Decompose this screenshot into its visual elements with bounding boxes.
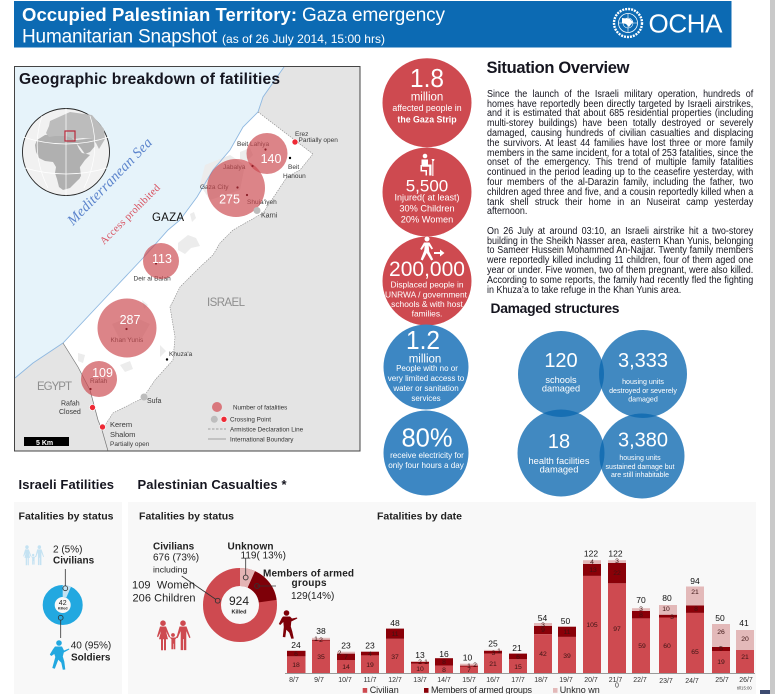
label: unknown: [228, 541, 286, 562]
label: civilians: [53, 545, 95, 567]
segment values: 1: [497, 648, 501, 655]
stat: 5,500 injured: [382, 148, 472, 236]
label: unknown: Unknown: [228, 541, 274, 552]
daily totals: 70: [636, 595, 646, 605]
heading: Situation Overview: Situation Overview: [486, 59, 630, 77]
daily totals: 38: [316, 626, 326, 636]
stat: housing sustained damage: [606, 430, 674, 479]
bars: members of armed groups: [287, 563, 730, 667]
fatality bubbles: [81, 133, 288, 397]
icon: injured person on crutch: [420, 154, 434, 176]
label: soldiers: Soldiers: [71, 653, 111, 664]
daily totals: 54: [538, 613, 547, 623]
text block: situation overview paragraph 1: Since the launch of the Israeli military operation, hundreds of: [486, 89, 753, 100]
segment values: 21: [489, 661, 497, 668]
donut: Israeli fatalities: Killed: [58, 606, 67, 610]
text block: situation overview paragraph 2: building in the Sheikh Nasser area, eastern Khan Yunis, belonging: [486, 236, 753, 247]
segment values: 2: [338, 650, 342, 657]
stat: 1.8 million affected: the Gaza Strip: [397, 115, 457, 125]
stat: 5,500 injured: Injured( at least): [394, 193, 460, 203]
icon: family red: [157, 620, 190, 650]
panel: Palestinian casualties: Fatalities by status: [139, 511, 234, 523]
bubble values: [92, 152, 281, 380]
label: civilians breakdown: Civilians: [153, 541, 195, 552]
segment values: 14: [342, 664, 350, 671]
label: Mediterranean Sea: Mediterranean Sea: [64, 135, 156, 229]
stat: 1.8 million affected: 1.8: [410, 63, 444, 93]
place labels: [59, 131, 338, 448]
date axis labels: 26/7: [739, 677, 753, 684]
stat: 5,500 injured: 30% Children: [399, 204, 455, 214]
place labels: Hanoun: [283, 173, 306, 180]
text block: situation overview paragraph 1: afternoon.: [486, 206, 527, 217]
label: unknown: 119( 13%): [240, 551, 286, 562]
place labels: Deir al Balah: [134, 276, 171, 282]
stat: 200,000 displaced: Displaced people in: [390, 279, 464, 289]
title: Occupied Palestinian Territory:: [22, 4, 297, 25]
daily totals: 10: [463, 652, 472, 662]
label: civilians breakdown: 109 Women: [132, 580, 195, 592]
segment values: 8: [442, 667, 446, 674]
segment values: 9: [541, 627, 545, 634]
text block: situation overview paragraph 1: multi-storey buildings) have been totally destroyed or severely: [486, 118, 753, 129]
place labels: Gaza City: [200, 184, 229, 191]
segment values: 105: [586, 622, 598, 629]
place labels: Rafah: [90, 378, 108, 385]
date axis labels: 15/7: [462, 677, 476, 684]
date axis labels: 14/7: [437, 677, 451, 684]
map legend: International Boundary: [230, 436, 294, 444]
bars: civilian: [287, 576, 754, 673]
date axis labels: 13/7: [413, 677, 427, 684]
label: members of armed groups: [263, 569, 354, 602]
text block: situation overview paragraph 2: in Khuza’a to take refuge in the Khan Yunis area.: [486, 285, 681, 296]
text block: situation overview paragraph 1: the survivors. At least 44 families have lost three or more family: [486, 138, 753, 149]
scale bar: [24, 437, 69, 447]
segment values: 35: [317, 654, 325, 661]
inset globe: [22, 108, 110, 196]
place labels: Kerem: [110, 420, 132, 429]
segment values: 10: [416, 666, 424, 673]
stat: housing sustained damage: 3,380: [618, 430, 668, 452]
segment values: 2: [418, 659, 422, 666]
date axis labels: 21/7: [609, 677, 622, 684]
stat: schools damaged: schools: [545, 375, 577, 385]
text block: situation overview paragraph 2: According to some reports, the family had recently fled the fighting: [486, 275, 753, 286]
date axis labels: 19/7: [559, 677, 573, 684]
panel: Palestinian casualties: Fatalities by date: [377, 511, 462, 523]
map legend: [208, 402, 304, 444]
date axis labels: [289, 677, 753, 690]
label: civilians breakdown: [132, 541, 199, 605]
stacked bar chart: fatalities by date: [285, 548, 755, 690]
stat: 5,500 injured: 20% Women: [401, 215, 453, 225]
stat: health facilities damaged: health facilities: [529, 456, 590, 466]
map legend: Number of fatalities: [233, 404, 287, 412]
segment values: 3: [670, 614, 674, 621]
stat: 1.8 million affected: million: [411, 92, 443, 104]
segment values: 10: [662, 606, 670, 613]
place labels: Closed: [59, 409, 81, 416]
daily totals: 50: [715, 613, 725, 623]
town markers: [89, 148, 267, 390]
stat: health facilities damaged: damaged: [540, 465, 578, 475]
text block: situation overview paragraph 1: continued in the period leading up to the ceasefire yesterday, with: [486, 167, 753, 178]
country labels: EGYPT: [37, 381, 72, 393]
icon: soldier blue: [50, 640, 69, 670]
coastline and borders: [15, 67, 284, 378]
date axis labels: 24/7: [685, 678, 699, 685]
segment values: 19: [366, 662, 374, 669]
segment values: 1: [314, 636, 318, 643]
daily totals: 23: [365, 640, 375, 650]
segment values: 42: [539, 651, 547, 658]
bubble values: 109: [92, 366, 113, 380]
stat: health facilities damaged: [529, 431, 590, 475]
stat: 80% electricity: 80%: [401, 425, 453, 453]
bubble values: 275: [219, 192, 240, 206]
stat: schools damaged: [542, 350, 580, 394]
segment values: 1: [467, 663, 471, 670]
segment values: 7: [344, 654, 348, 661]
text block: situation overview paragraph 1: and it is estimated that about 685 residential properties (including: [486, 108, 753, 119]
text block: situation overview paragraph 1: onset of the emergency. This trend of multiple family fatalities: [486, 157, 753, 168]
label: Access prohibited: Access prohibited: [98, 182, 163, 247]
place labels: Karni: [261, 212, 278, 220]
OCHA logotype: OCHA: [648, 8, 723, 38]
daily totals: 25: [488, 638, 498, 648]
place labels: Khan Yunis: [110, 337, 144, 344]
title: [22, 4, 446, 48]
date axis labels: 0: [615, 682, 619, 690]
label: soldiers: [71, 641, 111, 664]
segment values: 19: [717, 659, 725, 666]
text block: situation overview paragraph 1: homes have reportedly been directly targeted by Israeli airstrikes,: [486, 99, 753, 110]
segment values: 3: [615, 558, 619, 565]
date axis labels: 18/7: [534, 677, 548, 684]
place labels: Beit Lahiya: [237, 141, 270, 148]
stat: 200,000 displaced: families.: [412, 309, 442, 319]
segment values: 1: [424, 659, 428, 666]
daily totals: 80: [662, 593, 672, 603]
segment values: 4: [590, 559, 594, 566]
segment values: 2: [473, 662, 477, 669]
daily totals: 41: [739, 618, 749, 628]
Gaza strip: [63, 112, 313, 430]
segment values: [292, 558, 749, 674]
segment values: 3: [541, 622, 545, 629]
segment values: 22: [613, 570, 621, 577]
segment values: 20: [741, 636, 749, 643]
stat: 1.8 million affected: [382, 58, 472, 147]
donut: Palestinian casualties: Killed: [232, 609, 246, 615]
label: civilians: 2 (5%): [53, 545, 82, 556]
icon: person walking with arrow: [420, 236, 444, 260]
date axis labels: 17/7: [511, 677, 525, 684]
text block: situation overview paragraph 1: damaged, causing hundreds of civilian casualties and displacing: [486, 128, 753, 139]
segment values: 8: [694, 606, 698, 613]
icon: UN emblem: [614, 9, 642, 37]
stat: housing sustained damage: housing units: [619, 455, 661, 462]
daily totals: 94: [690, 576, 700, 586]
date axis labels: 12/7: [388, 677, 402, 684]
segment values: 21: [691, 589, 699, 596]
segment values: 37: [391, 654, 399, 661]
segment values: 8: [639, 612, 643, 619]
map heading: Geographic breakdown of fatilities: [19, 71, 280, 88]
date axis labels: 23/7: [659, 678, 673, 685]
stat: schools damaged: 120: [544, 350, 578, 372]
map legend: Armistice Declaration Line: [230, 426, 304, 434]
date axis labels: 8/7: [289, 677, 299, 684]
icon: soldier dark red: [279, 610, 297, 639]
panel: map of Gaza with geographic breakdown of fatalities: [14, 66, 360, 451]
stat: housing destroyed: 3,333: [618, 350, 668, 372]
stat: 200,000 displaced: [382, 236, 472, 326]
date axis labels: 9/7: [314, 677, 324, 684]
segment values: 7: [467, 667, 471, 674]
place labels: Shuja'iyeh: [247, 199, 277, 206]
label: civilians: Civilians: [53, 556, 95, 567]
header banner: [14, 1, 732, 48]
stat: 200,000 displaced: 200,000: [389, 258, 465, 281]
panel: Palestinian casualties: [128, 502, 756, 694]
segment values: 5: [719, 646, 723, 652]
stat: housing destroyed: damaged: [628, 396, 658, 404]
text block: situation overview paragraph 1: four members of the al-Darazin family, including the father, two: [486, 177, 753, 188]
label: civilians breakdown: 676 (73%): [153, 553, 199, 564]
segment values: 60: [663, 643, 671, 650]
text block: situation overview paragraph 1: tank shell struck their home in an Nuseirat camp yesterday: [486, 197, 753, 208]
title: (as of 26 July 2014, 15:00 hrs): [222, 32, 385, 46]
stat: 1.2 million without water: services: [411, 394, 441, 403]
text block: situation overview paragraph 2: On 26 July at around 03:10, an Israeli airstrike hit a two-storey: [486, 226, 753, 237]
place labels: Beit: [288, 164, 299, 171]
label: civilians breakdown: 206 Children: [132, 593, 196, 605]
segment values: 21: [741, 654, 749, 661]
stat: housing destroyed: housing units: [622, 378, 664, 386]
country labels: GAZA: [152, 212, 184, 224]
stat: 200,000 displaced: schools & with host: [391, 299, 464, 309]
daily totals: 48: [390, 618, 400, 628]
donut: Israeli fatalities: 42: [59, 600, 67, 607]
segment values: 39: [563, 653, 571, 660]
bubble values: 287: [120, 313, 140, 327]
daily totals: 23: [341, 640, 351, 650]
bubble values: 140: [261, 152, 281, 166]
title: Humanitarian Snapshot: [22, 26, 218, 48]
stat: 1.2 million without water: People with no or: [396, 364, 458, 373]
bars: unknown: [312, 560, 754, 666]
donut: Palestinian casualties: [182, 558, 277, 633]
segment values: 6: [516, 654, 520, 661]
stat: 80% electricity: [384, 410, 468, 496]
text block: situation overview paragraph 1: [486, 89, 754, 217]
country labels: [37, 212, 246, 393]
stat: 200,000 displaced: UNRWA / government: [385, 289, 468, 299]
map legend: Crossing Point: [230, 416, 271, 424]
title: Gaza emergency: [302, 5, 446, 26]
place labels: Khuza'a: [169, 351, 193, 358]
stat: health facilities damaged: 18: [548, 431, 570, 453]
text block: situation overview paragraph 1: members in the same incident, for a total of 253 fatalities, since the: [486, 148, 753, 159]
daily totals: 16: [439, 649, 449, 659]
panel: damaged structures bubbles: [518, 330, 687, 498]
date axis labels: 20/7: [584, 677, 598, 684]
date axis labels: 25/7: [715, 677, 729, 684]
segment values: 4: [368, 651, 372, 658]
sea: [15, 67, 284, 378]
daily totals: 21: [512, 643, 522, 653]
donut: Palestinian casualties: 924: [229, 594, 249, 608]
heading: Palestinian Casualties: Palestinian Casualties *: [138, 477, 287, 492]
panel: Israeli fatalities: [14, 502, 122, 694]
bubble values: 113: [152, 252, 172, 266]
label: members of armed groups: 129(14%): [291, 591, 334, 602]
place labels: Partially open: [110, 441, 150, 448]
stat: 80% electricity: receive electricity for: [390, 451, 464, 460]
stat: schools damaged: damaged: [542, 384, 580, 394]
chart legend: [363, 685, 600, 694]
stat: 80% electricity: only four hours a day: [388, 461, 465, 470]
segment values: 3: [492, 650, 496, 657]
label: civilians breakdown: including: [153, 565, 187, 575]
text block: situation overview paragraph 2: year or under. Five women, two of them pregnant, were also killed.: [486, 265, 753, 276]
label: members of armed groups: Members of armed: [263, 569, 354, 580]
stat: housing sustained damage: sustained damage but: [606, 464, 674, 471]
crossing markers: [90, 139, 298, 430]
segment values: 65: [691, 649, 699, 656]
segment values: 2: [319, 637, 323, 644]
daily totals: 24: [291, 640, 301, 650]
place labels: Erez: [295, 131, 308, 138]
stat: 1.2 million without water: [384, 324, 468, 410]
stacked bar chart: fatalities by date: till15:00: [737, 686, 752, 690]
donut: Israeli fatalities: [49, 569, 77, 638]
place labels: Jabalya: [223, 164, 246, 171]
stat: 1.8 million affected: affected people in: [392, 103, 462, 113]
stat: 1.2 million without water: million: [409, 354, 441, 366]
label: soldiers: 40 (95%): [71, 641, 111, 652]
segment values: 26: [717, 629, 725, 636]
segment values: 11: [563, 629, 571, 636]
stat: housing sustained damage: are still inhabitable: [611, 472, 669, 479]
stat: 5,500 injured: 5,500: [406, 177, 448, 196]
daily totals: 122: [584, 548, 598, 558]
segment values: 8: [442, 659, 446, 666]
text block: situation overview paragraph 2: [486, 226, 754, 296]
segment values: 11: [391, 631, 399, 638]
segment values: 59: [638, 643, 646, 650]
label: members of armed groups: groups: [292, 578, 327, 589]
date axis labels: 11/7: [363, 677, 377, 684]
segment values: 97: [613, 626, 621, 633]
place labels: Rafah: [61, 400, 80, 408]
text block: situation overview paragraph 1: children aged three and five, and a cousin reportedly killed when a: [486, 187, 753, 198]
place labels: Partially open: [298, 137, 338, 144]
panel: key figures column: [382, 58, 472, 495]
text block: situation overview paragraph 2: were reportedly killed including 11 children, four of them aged one: [486, 255, 753, 266]
daily totals: 122: [608, 548, 623, 558]
stat: 1.2 million without water: very limited access to: [388, 374, 465, 383]
place labels: Sufa: [147, 398, 162, 405]
place labels: Shalom: [110, 430, 135, 439]
heading: Damaged structures: Damaged structures: [490, 300, 620, 316]
text block: situation overview paragraph 2: to Sameer Hussein Mohammed An-Najjar. Twenty family members: [486, 245, 753, 256]
scale bar: 5 Km: [36, 440, 53, 447]
date axis labels: 22/7: [633, 677, 647, 684]
stat: 1.2 million without water: water or sanitation: [392, 384, 459, 393]
icon: family light blue: [23, 545, 44, 565]
date axis labels: 16/7: [486, 677, 500, 684]
stat: 1.2 million without water: 1.2: [406, 325, 440, 355]
segment values: 6: [294, 651, 298, 658]
panel: Israeli fatalities: Fatalities by status: [18, 511, 114, 523]
segment values: 13: [589, 567, 597, 574]
segment values: 15: [514, 664, 522, 671]
country labels: ISRAEL: [207, 297, 246, 309]
daily totals: 13: [415, 650, 425, 660]
segment values: 3: [639, 606, 643, 613]
segment values: 18: [292, 662, 300, 669]
daily totals: [291, 548, 749, 662]
stat: housing destroyed: destroyed or severely: [609, 387, 677, 395]
heading: Israeli Fatilities: Israeli Fatilities: [18, 477, 114, 492]
date axis labels: 10/7: [338, 677, 352, 684]
daily totals: 50: [561, 616, 570, 626]
stat: housing destroyed: [609, 350, 677, 404]
